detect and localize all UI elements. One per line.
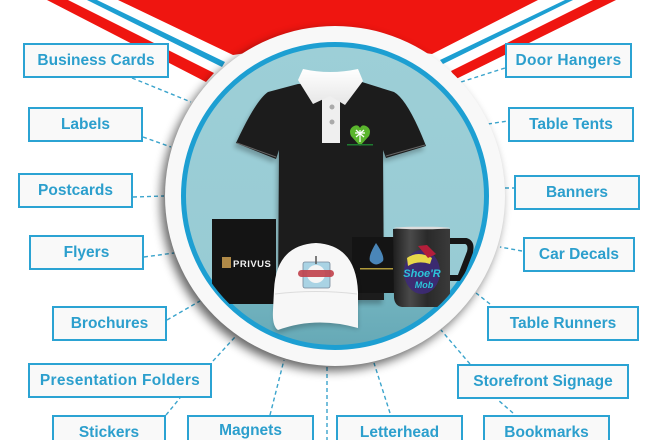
label: Presentation Folders: Presentation Folders <box>40 372 200 388</box>
black box: Privus: PRIVUS <box>233 259 271 270</box>
label: Flyers: Flyers <box>64 244 109 260</box>
blue ring <box>184 44 486 348</box>
connector lines <box>132 68 522 440</box>
products <box>212 69 470 333</box>
label: Letterhead <box>336 415 463 440</box>
label: Car Decals: Car Decals <box>539 246 619 262</box>
white cap <box>273 243 358 333</box>
label: Postcards: Postcards <box>38 182 113 198</box>
label: Door Hangers: Door Hangers <box>515 52 622 68</box>
collar and placket <box>322 92 340 143</box>
circle shadow <box>161 31 501 371</box>
label: Magnets: Magnets <box>219 422 282 438</box>
mug: Shoe'R <box>403 268 441 280</box>
icon: heart logo <box>350 125 370 146</box>
label: Business Cards: Business Cards <box>37 52 155 68</box>
label: Magnets <box>187 415 314 440</box>
label: Table Tents <box>508 107 634 142</box>
label: Door Hangers <box>505 43 632 78</box>
mug <box>393 227 470 307</box>
label: Bookmarks: Bookmarks <box>504 424 589 440</box>
black box: Privus <box>212 219 276 304</box>
label: Brochures <box>52 306 167 341</box>
label: Storefront Signage: Storefront Signage <box>473 372 613 390</box>
label: Flyers <box>29 235 144 270</box>
icon: polo shirt <box>234 69 426 304</box>
label: Labels: Labels <box>61 116 110 132</box>
label: Table Tents: Table Tents <box>529 116 613 132</box>
label: Postcards <box>18 173 133 208</box>
white circle frame <box>165 26 505 366</box>
label: Brochures: Brochures <box>71 314 148 332</box>
label: Labels <box>28 107 143 142</box>
label: Letterhead: Letterhead <box>360 424 439 440</box>
label: Banners <box>514 175 640 210</box>
mug: Mob <box>415 280 434 290</box>
label: Stickers <box>52 415 166 440</box>
business card <box>360 237 394 293</box>
label: Car Decals <box>523 237 635 272</box>
label: Stickers: Stickers <box>79 424 139 440</box>
label: Table Runners: Table Runners <box>510 314 616 332</box>
label: Storefront Signage <box>457 364 629 399</box>
label: Banners: Banners <box>546 184 608 200</box>
label: Business Cards <box>23 43 169 78</box>
banner: red chevron with stripes <box>47 0 616 82</box>
label: Presentation Folders <box>28 363 212 398</box>
label: Bookmarks <box>483 415 610 440</box>
label: Table Runners <box>487 306 639 341</box>
